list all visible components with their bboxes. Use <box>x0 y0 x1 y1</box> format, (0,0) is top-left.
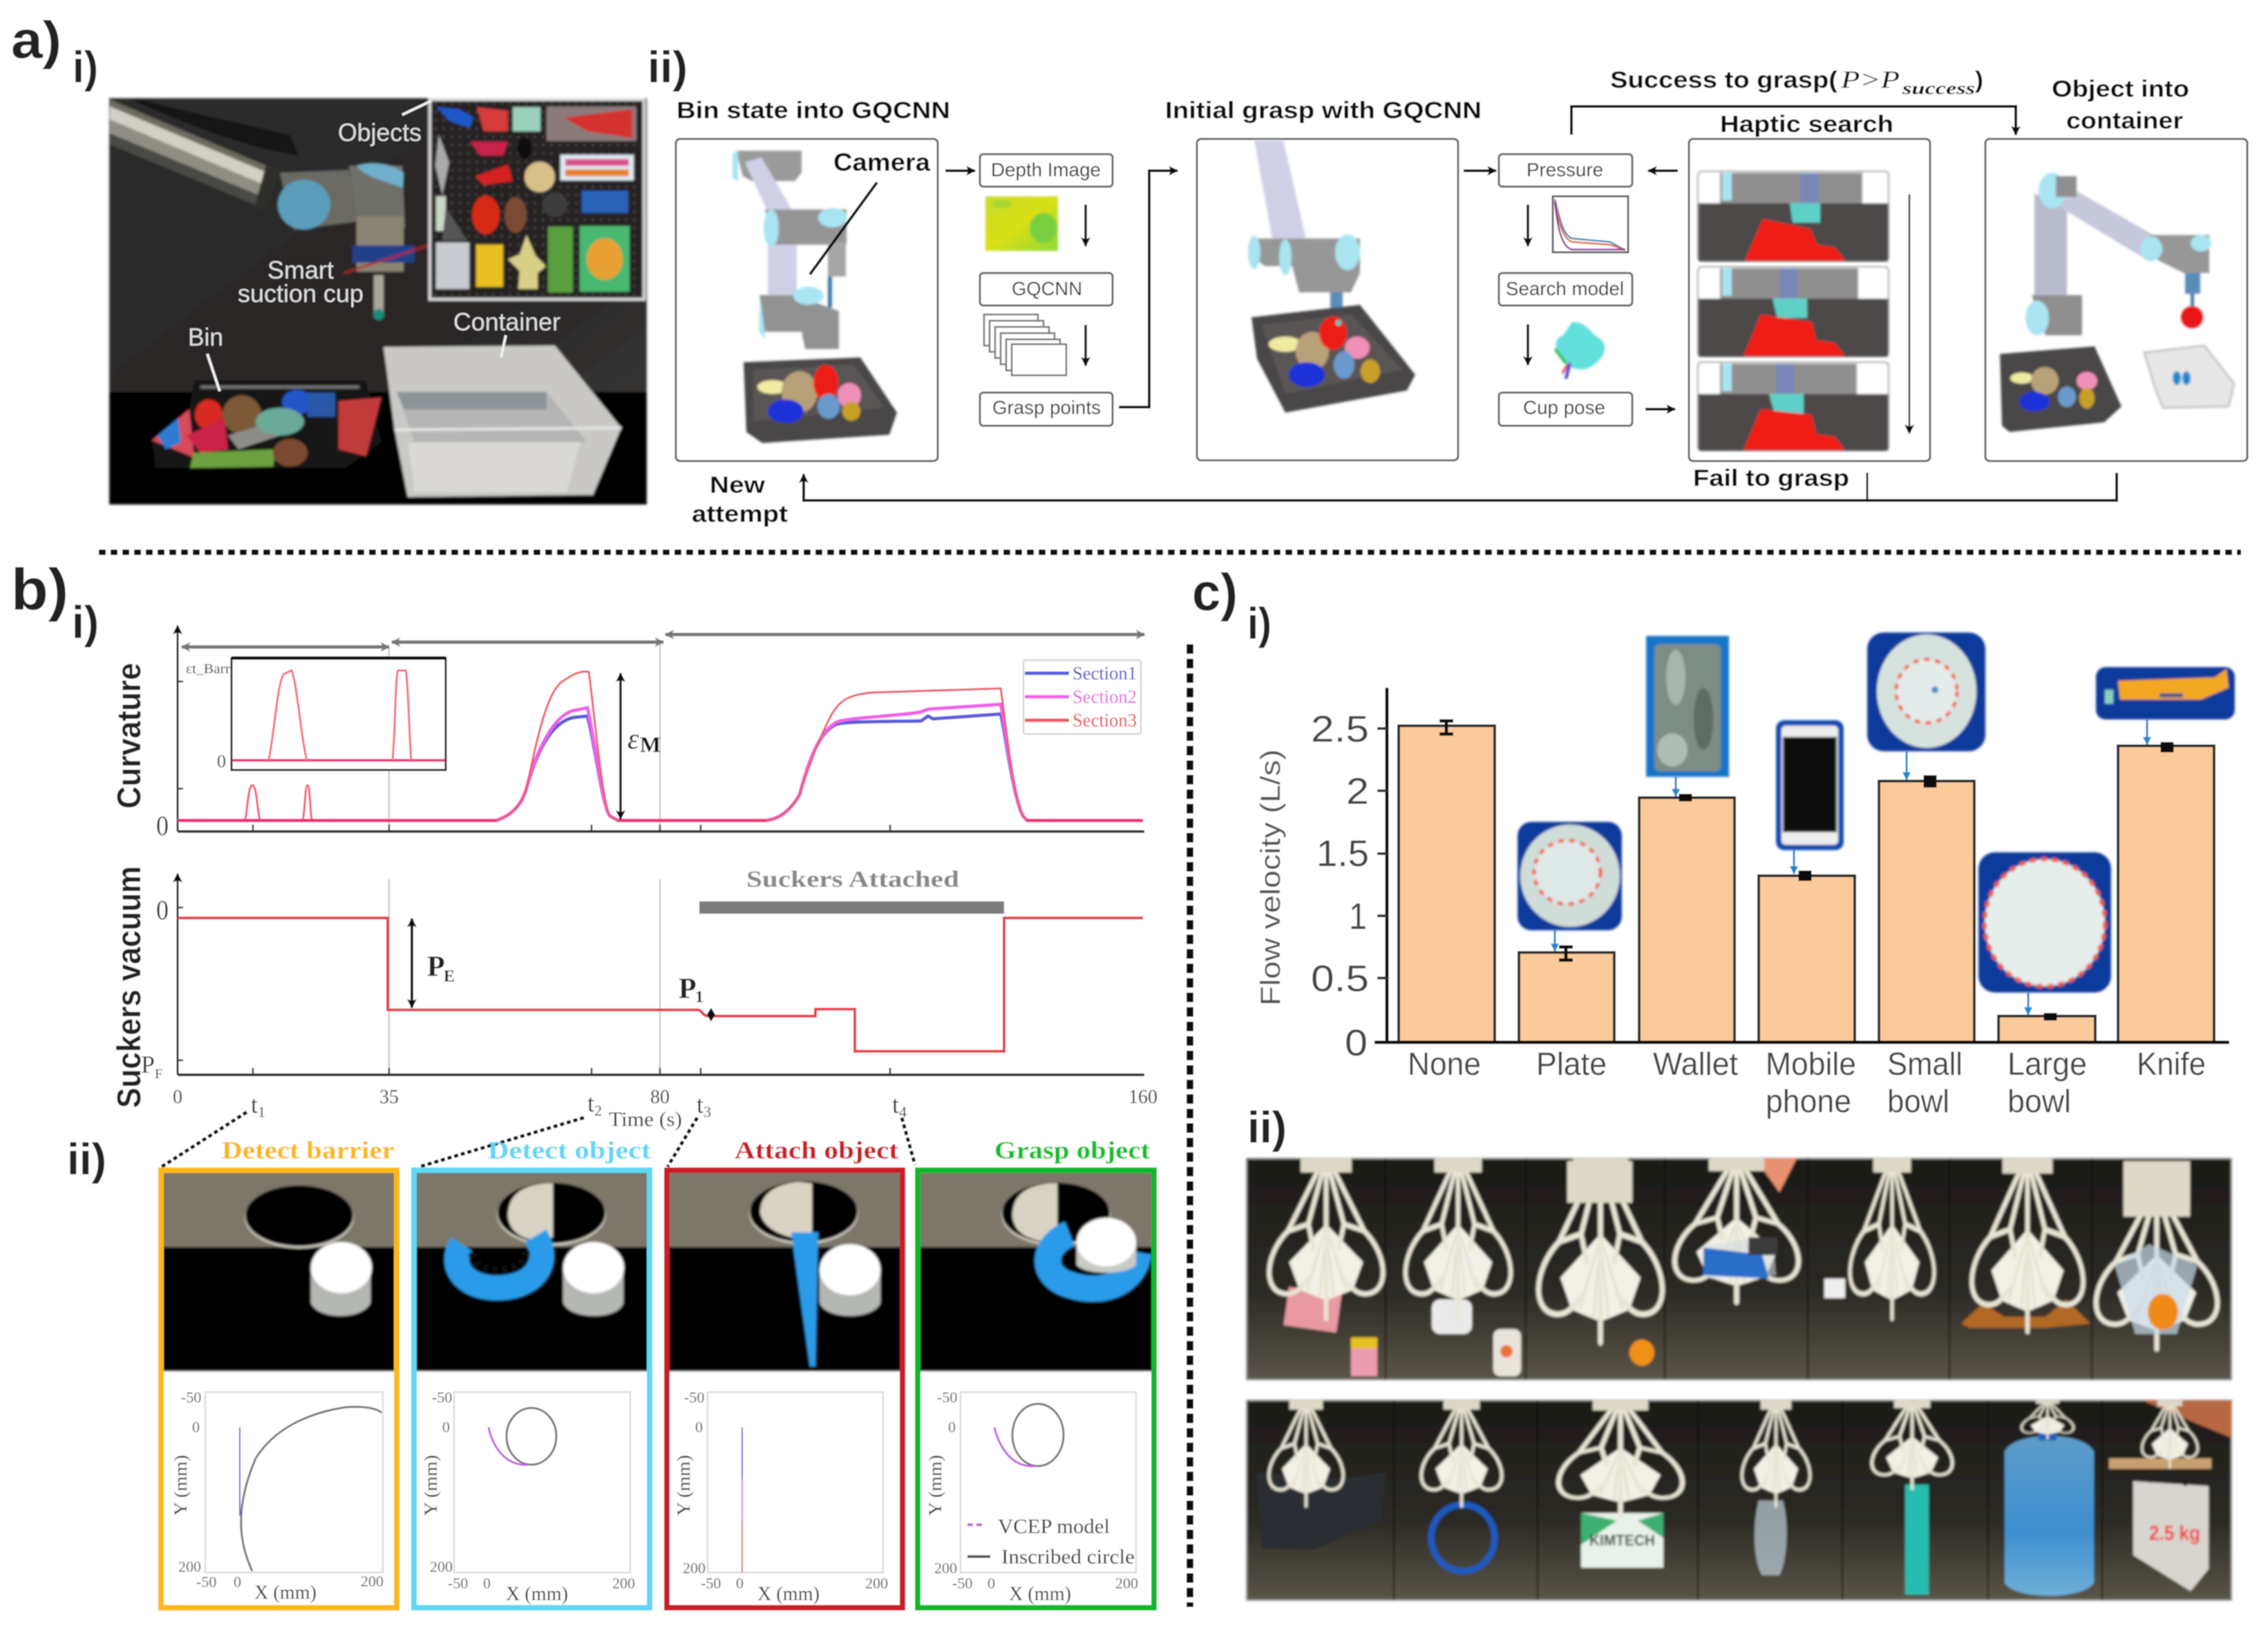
plot: attach object shape: 0 <box>695 1418 703 1436</box>
tick label: PF: F <box>155 1067 162 1082</box>
y axis title: Y (mm) <box>925 1455 945 1516</box>
arrow: search model down <box>1527 324 1529 365</box>
plot: detect object shape: 200 <box>612 1575 635 1592</box>
photo label: Smart: Smart <box>267 256 334 284</box>
panel label: b i): i) <box>72 597 99 648</box>
inset label: threshold: εt_Barr <box>186 661 230 677</box>
box: Cup pose: Cup pose <box>1523 397 1605 418</box>
x tick labels: t <box>251 1091 258 1118</box>
label: success to grasp: P>P <box>1840 66 1900 93</box>
chart: suckers vacuum over time <box>141 867 1157 1131</box>
inset photo: plate <box>1518 822 1622 930</box>
x tick labels: t <box>892 1091 899 1118</box>
phase span arrows <box>182 635 1144 647</box>
heading: container: container <box>2066 108 2183 134</box>
y tick labels: 0.5 <box>1311 958 1369 999</box>
x tick labels: 80 <box>650 1087 670 1108</box>
label: suckers attached: Suckers Attached <box>746 867 959 892</box>
box: GQCNN: GQCNN <box>1012 278 1082 299</box>
photo label: Container: Container <box>453 308 560 336</box>
suction cup model icon <box>1555 322 1605 379</box>
x category labels: None <box>1408 1046 1481 1082</box>
axis title: Time: Time (s) <box>609 1108 682 1131</box>
photo strip: gripper row 1 <box>1247 1158 2231 1380</box>
plot: detect object shape: -50 <box>448 1575 468 1592</box>
panel: attach object <box>667 1170 903 1608</box>
box: Pressure <box>1499 154 1632 187</box>
arrow: failure back to new attempt <box>804 473 2117 500</box>
panel: a-i robot photo <box>109 98 647 505</box>
legend: model and inscribed circle: Inscribed circle <box>1001 1546 1135 1568</box>
plot: detect object shape: 0 <box>483 1575 491 1592</box>
x tick labels: 160 <box>1128 1087 1157 1108</box>
plot: grasp object shape: 200 <box>1115 1575 1138 1592</box>
heading: Bin state into GQCNN: Bin state into GQCNN <box>677 97 950 124</box>
y tick labels: 2 <box>1346 771 1369 812</box>
haptic frame 3 <box>1698 362 1889 451</box>
label: attempt: attempt <box>692 501 788 527</box>
x category labels: Knife <box>2137 1046 2206 1082</box>
inset photo: mobile phone <box>1776 720 1844 850</box>
panel label: c ii): ii) <box>1247 1102 1287 1152</box>
plot: attach object shape: 0 <box>736 1575 744 1592</box>
plot: attach object shape: -50 <box>701 1575 721 1592</box>
y tick labels: 2.5 <box>1311 708 1369 750</box>
panel label: a ii): ii) <box>648 42 688 92</box>
inset photo: wallet <box>1646 636 1729 777</box>
label: success to grasp <box>1610 66 1983 98</box>
panel: detect object <box>414 1170 650 1608</box>
y tick labels <box>1311 708 1369 1064</box>
label: P1: P <box>679 973 697 1005</box>
box: Grasp points: Grasp points <box>992 397 1101 418</box>
label: epsilon M: ε <box>627 724 639 755</box>
x category labels: Plate <box>1536 1046 1607 1082</box>
plot: detect object shape: 0 <box>442 1418 450 1436</box>
connector: t2 to detect object <box>419 1118 584 1167</box>
x axis title: X (mm) <box>506 1584 568 1605</box>
camera pointer line <box>810 182 877 274</box>
heading: Detect barrier: Detect barrier <box>222 1136 395 1164</box>
haptic frame 2 <box>1698 267 1889 357</box>
inset photo: small bowl <box>1867 632 1985 751</box>
arrow: success path to container <box>1571 106 2016 135</box>
y tick labels: 0 <box>1345 1022 1368 1064</box>
objects row 2: KIMTECH <box>1589 1532 1655 1549</box>
legend: sections: Section3 <box>1072 710 1137 731</box>
axis title: Suckers vacuum: Suckers vacuum <box>111 866 148 1108</box>
plot: detect barrier shape: 0 <box>234 1573 241 1590</box>
panel: object into container robot <box>1985 139 2247 461</box>
connector: t3 to attach object <box>668 1118 697 1167</box>
arrow: down to GQCNN <box>1084 205 1087 246</box>
grippers row 1 <box>1269 1158 2218 1349</box>
legend: sections <box>1023 660 1141 734</box>
x tick labels: 4 <box>899 1103 907 1120</box>
depth heat map <box>985 196 1058 251</box>
panel label: a i): i) <box>73 42 98 92</box>
objects row 2 <box>1256 1400 2231 1596</box>
x tick labels: 2 <box>594 1102 602 1119</box>
plot: detect barrier shape <box>171 1389 384 1604</box>
photo label: Objects: Objects <box>338 118 422 147</box>
plot: detect object shape: 200 <box>430 1558 453 1575</box>
label: P1: 1 <box>695 988 703 1006</box>
curve: vacuum pressure <box>178 918 1143 1051</box>
plot: grasp object shape: 0 <box>948 1418 956 1436</box>
x category labels: Wallet <box>1653 1046 1738 1082</box>
inset photo: large bowl <box>1978 852 2111 993</box>
box: Search model: Search model <box>1506 278 1624 299</box>
leader line: objects <box>402 101 431 115</box>
plot: grasp object shape <box>925 1389 1138 1605</box>
connector: t4 to grasp object <box>902 1118 915 1165</box>
leader line: bin <box>207 354 220 391</box>
label: New: New <box>710 472 766 498</box>
arrow: haptic to pressure <box>1648 169 1678 172</box>
plot: attach object shape: 200 <box>683 1559 706 1577</box>
inset chart <box>186 658 446 771</box>
x tick labels: t <box>587 1089 594 1117</box>
box: Search model <box>1499 273 1632 306</box>
legend: model and inscribed circle: VCEP model <box>998 1515 1110 1538</box>
arrow: cup pose to haptic search <box>1645 408 1675 411</box>
box: GQCNN <box>980 273 1113 306</box>
legend: sections: Section2 <box>1072 686 1137 707</box>
feature map stack <box>984 314 1066 375</box>
label: P1 <box>679 973 703 1006</box>
axis title: flow velocity: Flow velocity (L/s) <box>1256 749 1286 1006</box>
curve: section 2 <box>178 704 1143 820</box>
plot: detect barrier shape: 200 <box>361 1572 384 1590</box>
label: PE: P <box>427 951 445 983</box>
x axis title: X (mm) <box>757 1584 820 1605</box>
x category labels: phone <box>1766 1083 1851 1119</box>
label: success to grasp: Success to grasp( <box>1610 67 1838 93</box>
panel label: c i): i) <box>1247 599 1272 648</box>
plot: grasp object shape: 200 <box>934 1559 957 1577</box>
y axis title: Y (mm) <box>171 1455 191 1516</box>
tick label: vacuum 0: 0 <box>156 894 169 926</box>
heading: Grasp object: Grasp object <box>994 1136 1150 1164</box>
tick label: PF <box>141 1051 162 1082</box>
blue pointer arrows <box>1555 720 2147 1015</box>
label: success to grasp: success <box>1902 79 1975 98</box>
box: Pressure: Pressure <box>1527 159 1603 180</box>
y tick labels: 1.5 <box>1316 833 1369 874</box>
axes <box>1374 688 2229 1042</box>
panel label: b ii): ii) <box>67 1134 106 1184</box>
label: PE: E <box>444 968 455 986</box>
box: Cup pose <box>1499 393 1632 426</box>
heading: Detect object: Detect object <box>488 1136 651 1164</box>
panel: initial grasp robot <box>1197 139 1458 460</box>
gripper details and held objects row 1 <box>1567 1161 2198 1334</box>
plot: attach object shape <box>674 1389 888 1605</box>
label: epsilon M: M <box>640 732 661 757</box>
axis title: Curvature: Curvature <box>111 663 148 809</box>
photo strip: gripper row 2 <box>1247 1400 2231 1600</box>
x tick labels: 1 <box>258 1103 265 1120</box>
x tick labels: 35 <box>379 1087 399 1108</box>
haptic frame 1 <box>1698 171 1889 261</box>
box: Grasp points <box>980 393 1113 426</box>
panel label: b): b) <box>11 557 68 622</box>
panel: bin state robot <box>676 139 938 461</box>
tick label: PF: P <box>141 1051 155 1078</box>
marker: P1 diamond <box>707 1008 715 1022</box>
leader line: container <box>501 335 506 357</box>
plot: detect barrier shape: -50 <box>196 1573 216 1590</box>
label: Fail to grasp: Fail to grasp <box>1693 465 1849 491</box>
arrow: search sequence <box>1909 194 1910 433</box>
x category labels <box>1408 1046 2206 1119</box>
x tick labels <box>173 1087 1157 1120</box>
x axis title: X (mm) <box>1009 1584 1071 1605</box>
connector: t1 to detect barrier <box>162 1112 247 1167</box>
plot: detect barrier shape: 200 <box>178 1558 201 1575</box>
bar: suckers attached <box>699 901 1004 914</box>
error bars <box>1439 721 2172 1019</box>
x category labels: bowl <box>1887 1083 1949 1119</box>
x category labels: bowl <box>2007 1083 2071 1119</box>
heading: Haptic search: Haptic search <box>1720 111 1893 138</box>
label: Camera: Camera <box>833 148 931 176</box>
panel label: c): c) <box>1192 563 1238 622</box>
clear container <box>384 346 621 497</box>
box: Depth Image: Depth Image <box>991 159 1101 180</box>
plot: detect object shape <box>421 1389 635 1605</box>
panel: detect barrier <box>161 1170 397 1608</box>
panel: grasp object <box>918 1170 1154 1608</box>
legend: sections: Section1 <box>1072 663 1137 684</box>
x category labels: Small <box>1887 1046 1963 1082</box>
label: epsilon M <box>627 724 661 757</box>
bin with objects <box>152 380 381 468</box>
objects row 1 <box>1283 1158 2090 1376</box>
box: Depth Image <box>980 154 1113 187</box>
x tick labels: 3 <box>703 1103 711 1120</box>
x tick labels: 0 <box>173 1087 182 1108</box>
arrow: initial grasp to pressure <box>1464 169 1496 172</box>
tick label: curvature 0: 0 <box>156 810 169 841</box>
inset objects board <box>430 100 644 299</box>
plot: grasp object shape: 0 <box>987 1575 995 1592</box>
label: success to grasp: ) <box>1975 67 1983 93</box>
x tick labels: t <box>697 1091 703 1118</box>
chart: curvature over time <box>156 626 1144 841</box>
arrow: down to grasp points <box>1084 325 1087 366</box>
plot: detect object shape: -50 <box>432 1389 452 1406</box>
plot: attach object shape: 200 <box>865 1575 888 1592</box>
x axis title: X (mm) <box>254 1582 316 1604</box>
photo label: Bin: Bin <box>188 323 223 351</box>
curve: section 3 <box>178 672 1143 820</box>
panel: haptic search <box>1689 139 1930 461</box>
bar chart: flow velocity <box>1256 632 2235 1119</box>
plot: grasp object shape: -50 <box>952 1575 972 1592</box>
connector: haptic failure stub <box>1866 473 1869 500</box>
arrow: PE <box>410 919 413 1008</box>
arrow: pressure down <box>1527 205 1529 246</box>
plot: detect barrier shape: -50 <box>181 1389 201 1406</box>
plot: grasp object shape: -50 <box>937 1389 957 1406</box>
plot: detect barrier shape: 0 <box>192 1418 200 1436</box>
heading: Object into: Object into <box>2052 76 2189 102</box>
arrow: epsilon M <box>619 673 622 819</box>
y axis title: Y (mm) <box>674 1455 694 1516</box>
arrow: grasp points to initial grasp <box>1119 171 1178 407</box>
x category labels: Mobile <box>1766 1046 1856 1082</box>
heading: Attach object: Attach object <box>735 1136 898 1164</box>
x category labels: Large <box>2007 1046 2087 1082</box>
grippers row 2 <box>1269 1400 2198 1516</box>
label: PE <box>427 951 455 986</box>
inset photo: knife <box>2096 667 2235 720</box>
panel label: a): a) <box>11 11 62 70</box>
heading: Initial grasp with GQCNN: Initial grasp with GQCNN <box>1165 97 1482 124</box>
legend: model and inscribed circle <box>967 1515 1135 1568</box>
y tick labels: 1 <box>1349 896 1367 937</box>
arrow: bin state to depth image <box>945 169 975 172</box>
pressure graph <box>1553 196 1628 252</box>
photo label: suction cup: suction cup <box>238 279 363 308</box>
plot: attach object shape: -50 <box>684 1389 704 1406</box>
label: 2.5 kg: 2.5 kg <box>2149 1522 2200 1545</box>
y axis title: Y (mm) <box>421 1455 441 1516</box>
bars <box>1399 726 2214 1042</box>
inset tick: 0: 0 <box>217 751 226 771</box>
curve: section 1 <box>178 714 1143 820</box>
